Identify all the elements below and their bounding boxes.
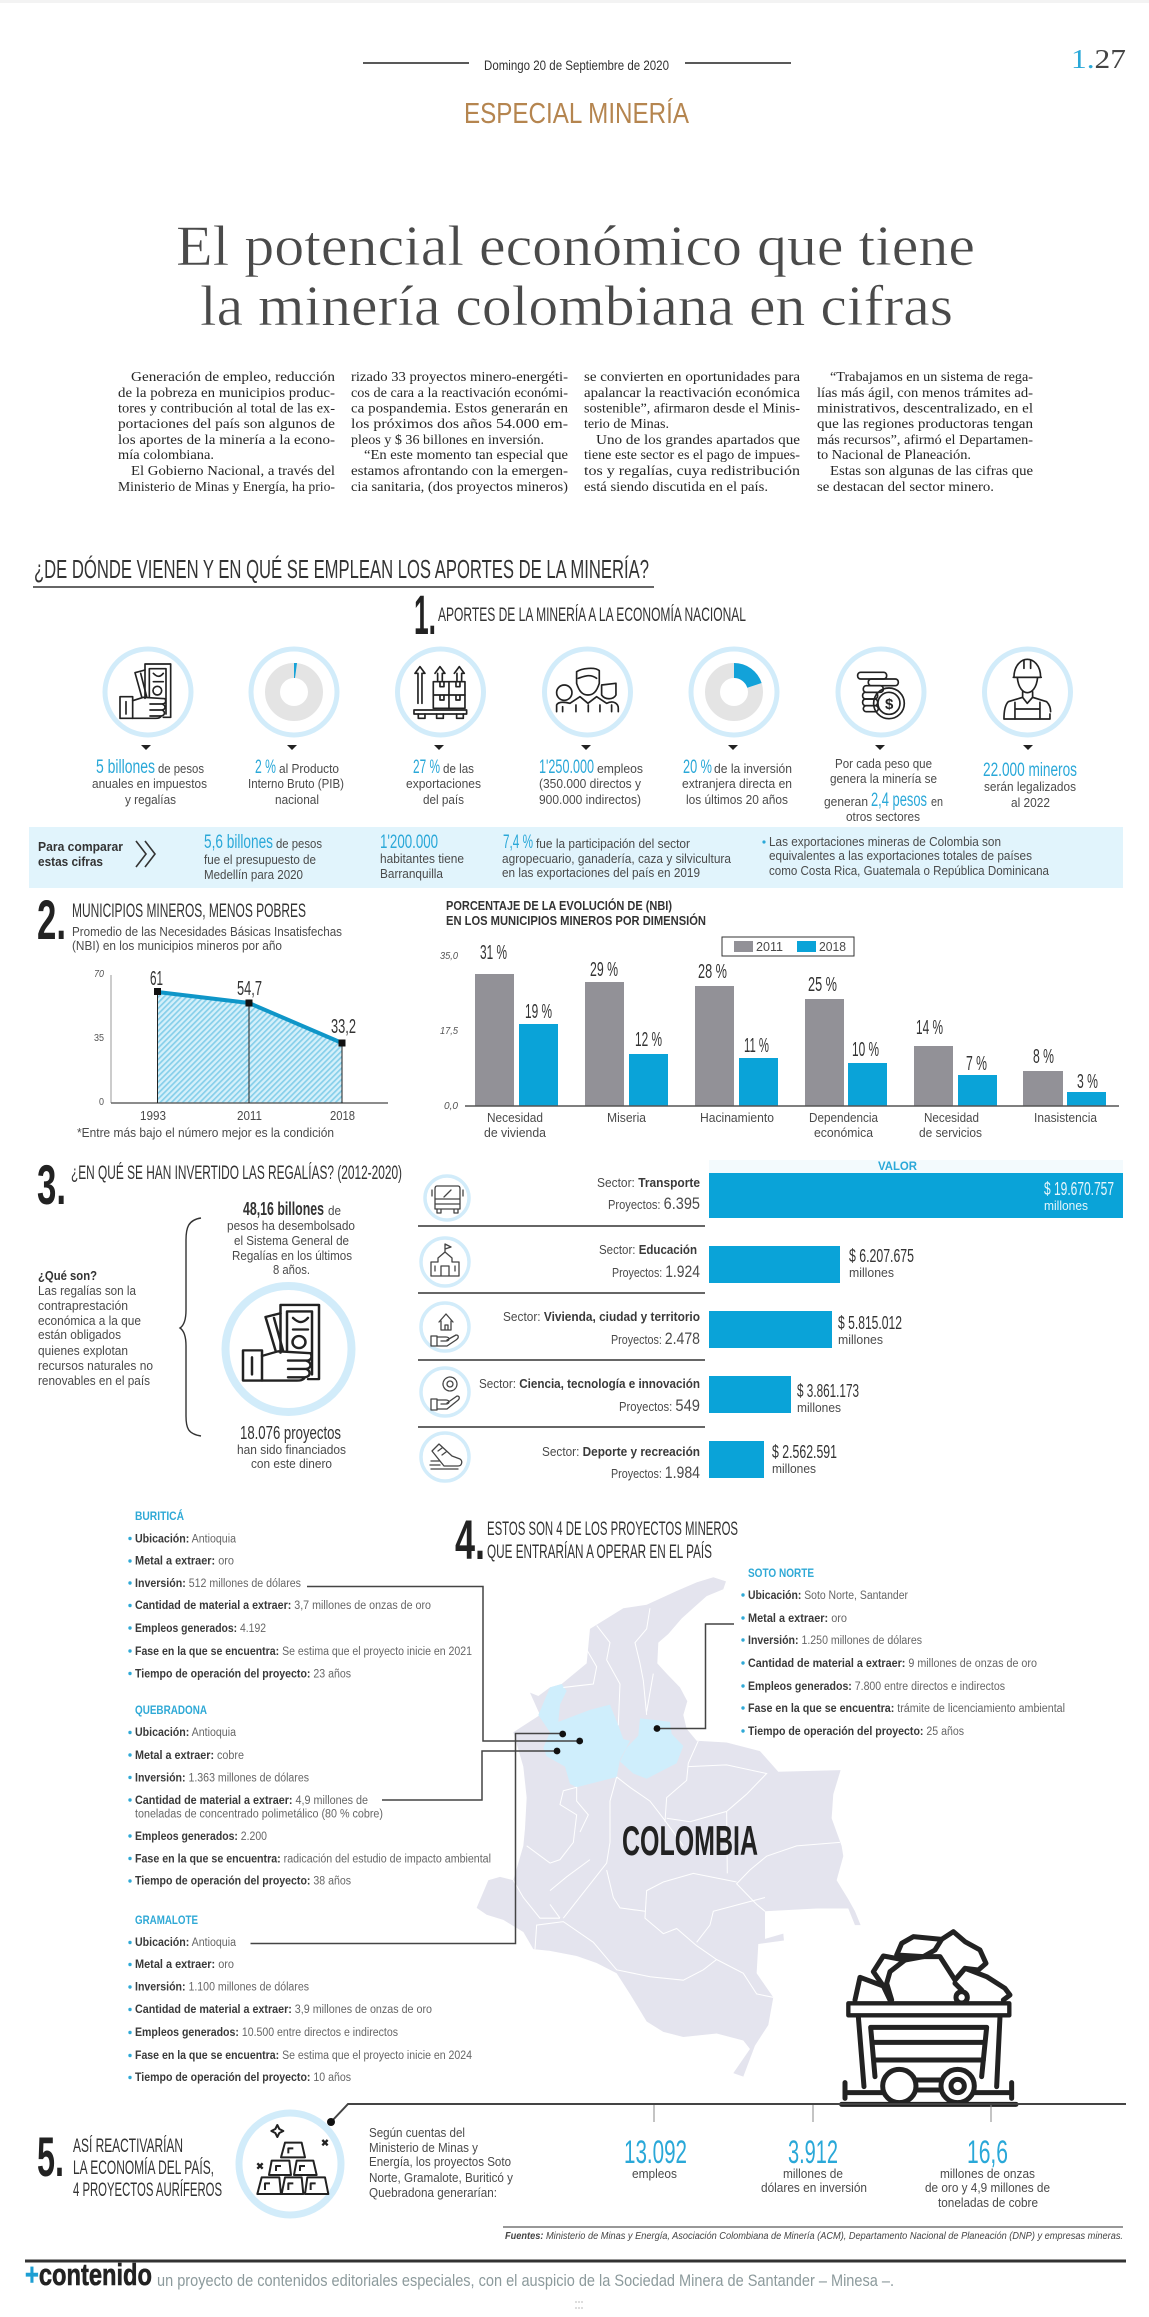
print registration marks xyxy=(576,2301,582,2309)
stat 4: empleos xyxy=(539,649,643,807)
intro text: column 4 xyxy=(817,369,1034,494)
sector: transporte: Proyectos: 6.395 xyxy=(608,1194,700,1213)
project: Buriticá: Inversión: 512 millones de dólares xyxy=(135,1578,301,1590)
text: según cuentas xyxy=(369,2125,513,2200)
bar value labels: 31 % xyxy=(480,942,507,964)
icon: bus xyxy=(425,1176,469,1220)
sector: deporte: millones xyxy=(772,1461,816,1476)
category labels xyxy=(484,1110,1098,1140)
stat 7: 22.000 mineros: al 2022 xyxy=(1011,795,1050,810)
section 5 divider line xyxy=(327,2104,1126,2126)
section 2 heading: 2. xyxy=(37,888,66,951)
donut chart: 2 % xyxy=(251,649,337,735)
sector: vivienda: Proyectos: 2.478 xyxy=(611,1329,700,1348)
stat: onzas: de oro y 4,9 millones de xyxy=(925,2180,1050,2195)
intro text: column 2: cia sanitaria, (dos proyectos mineros) xyxy=(351,479,568,494)
comparison: Barranquilla: habitantes tiene xyxy=(380,851,464,866)
sector: ciencia: Sector: Ciencia, tecnología e innovación xyxy=(479,1376,700,1391)
chart: valor por sector xyxy=(418,1159,1123,1482)
stat 1: 5 billones: anuales en impuestos xyxy=(92,776,207,791)
intro text: column 1: Generación de empleo, reducción xyxy=(131,369,335,384)
project: Quebradona xyxy=(128,1705,491,1888)
bar value labels: 28 % xyxy=(698,961,727,983)
intro text: column 4: que las regiones productoras tengan xyxy=(817,416,1033,431)
stat 6: 2,4 pesos xyxy=(824,649,943,824)
project: Quebradona: Empleos generados: 2.200 xyxy=(135,1831,267,1843)
text: qué son las regalías xyxy=(38,1268,153,1388)
comparison: exports: como Costa Rica, Guatemala o República Dominicana xyxy=(769,863,1050,878)
section 5 heading xyxy=(37,2125,222,2201)
intro text: column 3: apalancar la reactivación económica xyxy=(584,385,800,400)
stat 2: 2 % PIB: Interno Bruto (PIB) xyxy=(248,776,344,791)
project: Buriticá: Tiempo de operación del proyecto: 23 años xyxy=(135,1668,351,1680)
sector: ciencia: $ 3.861.173 xyxy=(797,1381,859,1401)
section label: ESPECIAL MINERÍA xyxy=(464,97,690,130)
line chart: NBI promedio: 1993 xyxy=(140,1108,166,1123)
section 3 heading: 3. xyxy=(37,1153,66,1216)
stat 5: 20 % inversión: extranjera directa en xyxy=(682,776,792,791)
category labels: Necesidad xyxy=(487,1110,543,1125)
category labels: Inasistencia xyxy=(1034,1110,1098,1125)
stat 5: 20 % inversión: los últimos 20 años xyxy=(686,792,788,807)
intro text: column 4: ministrativos, descentralizado, en el xyxy=(817,400,1033,416)
sector: deporte: $ 2.562.591 xyxy=(772,1442,837,1462)
icon: money in hand xyxy=(105,649,191,735)
intro text: column 1: los aportes de la minería a la econo- xyxy=(118,432,336,447)
chart title xyxy=(446,898,706,928)
sector: deporte xyxy=(421,1433,837,1482)
stat 7: 22.000 mineros xyxy=(983,649,1077,810)
project: Buriticá: BURITICÁ xyxy=(135,1510,184,1523)
category labels: económica xyxy=(814,1125,874,1140)
stat 6: 2,4 pesos: 2,4 pesos xyxy=(871,790,927,811)
stat: empleos: empleos xyxy=(632,2166,677,2181)
project: Quebradona: Tiempo de operación del proyecto: 38 años xyxy=(135,1876,351,1888)
bar value labels: 10 % xyxy=(852,1039,879,1061)
line chart: NBI promedio: 2011 xyxy=(237,1108,262,1123)
section 3 heading xyxy=(37,1153,402,1216)
comparison label: Para comparar xyxy=(38,839,123,854)
icon: coins xyxy=(838,649,924,735)
text: qué son las regalías: recursos naturales no xyxy=(38,1358,153,1373)
comparison: exports: equivalentes a las exportaciones totales de países xyxy=(769,848,1032,863)
text: qué son las regalías: están obligados xyxy=(38,1327,121,1342)
text: según cuentas: Norte, Gramalote, Buriticó y xyxy=(369,2170,513,2185)
comparison: agro: en las exportaciones del país en 2019 xyxy=(502,865,700,880)
line chart: NBI promedio: 2018 xyxy=(330,1108,355,1123)
project: Quebradona: Cantidad de material a extraer: 4,9 millones de xyxy=(135,1795,368,1807)
text: 48,16 billones: de xyxy=(328,1203,341,1218)
sector: transporte: $ 19.670.757 xyxy=(1044,1179,1114,1199)
icon: coins: $ xyxy=(885,696,894,713)
text: 48,16 billones: 8 años. xyxy=(273,1262,310,1277)
sector: transporte xyxy=(425,1173,1123,1220)
intro text: column 4: to Nacional de Planeación. xyxy=(817,447,971,462)
title: la minería colombiana en cifras xyxy=(200,275,953,338)
bar value labels xyxy=(480,942,1098,1093)
text: según cuentas: Ministerio de Minas y xyxy=(369,2140,478,2155)
stat 6: 2,4 pesos: Por cada peso que xyxy=(835,756,932,771)
text: 18.076 proyectos xyxy=(237,1423,346,1471)
stat 1: 5 billones xyxy=(92,649,207,807)
stat 2: 2 % PIB: 2 % xyxy=(255,757,276,778)
comparison label: estas cifras xyxy=(38,854,103,869)
text: qué son las regalías: renovables en el país xyxy=(38,1373,150,1388)
stat 6: 2,4 pesos: genera la minería se xyxy=(830,771,937,786)
project: Gramalote: Ubicación: Antioquia xyxy=(135,1937,237,1949)
bar value labels: 11 % xyxy=(744,1035,769,1057)
line chart: NBI promedio: 33,2 xyxy=(331,1016,356,1038)
project: Quebradona: Metal a extraer: cobre xyxy=(135,1750,244,1762)
sector: educación: Proyectos: 1.924 xyxy=(612,1262,700,1281)
stat: onzas: 16,6 xyxy=(967,2134,1008,2170)
chart title: PORCENTAJE DE LA EVOLUCIÓN DE (NBI) xyxy=(446,898,672,913)
intro text: column 1: de la pobreza en municipios produc- xyxy=(118,385,336,400)
category labels: Dependencia xyxy=(809,1110,879,1125)
intro text: column 1: mía colombiana. xyxy=(118,447,214,462)
text: según cuentas: Según cuentas del xyxy=(369,2125,465,2140)
footer xyxy=(25,2257,894,2292)
footer rule xyxy=(25,2260,1126,2262)
intro text: column 3: tos y regalías, cuya redistribución xyxy=(584,463,800,478)
sector: deporte: Sector: Deporte y recreación xyxy=(542,1444,700,1459)
line chart: NBI promedio: 61 xyxy=(150,968,163,990)
stat: onzas: toneladas de cobre xyxy=(938,2195,1038,2210)
footer: un proyecto de contenidos editoriales especiales, con el auspicio de la Sociedad Minera de Santander – Minesa –. xyxy=(157,2271,894,2290)
project: Soto Norte: Cantidad de material a extraer: 9 millones de onzas de oro xyxy=(748,1658,1037,1670)
sector: transporte: millones xyxy=(1044,1198,1088,1213)
stat 4: empleos: (350.000 directos y xyxy=(539,776,641,791)
project: Quebradona: Inversión: 1.363 millones de dólares xyxy=(135,1773,309,1785)
project: Buriticá: Empleos generados: 4.192 xyxy=(135,1623,266,1635)
project: Quebradona: Ubicación: Antioquia xyxy=(135,1727,237,1739)
sector: vivienda: Sector: Vivienda, ciudad y territorio xyxy=(503,1309,700,1324)
project: Soto Norte: Ubicación: Soto Norte, Santander xyxy=(748,1590,908,1602)
comparison: agro: fue la participación del sector xyxy=(536,836,691,851)
bar value labels: 8 % xyxy=(1033,1046,1054,1068)
stat: inversión: dólares en inversión xyxy=(761,2180,867,2195)
stat 2: 2 % PIB xyxy=(248,649,344,807)
stat 2: 2 % PIB: nacional xyxy=(275,792,319,807)
panel: para comparar estas cifras xyxy=(29,827,1123,888)
stat 2: 2 % PIB: al Producto xyxy=(279,761,339,776)
icon: group of people xyxy=(544,649,630,735)
sector: transporte: Sector: Transporte xyxy=(597,1175,700,1190)
title xyxy=(176,215,975,338)
stat: inversión: 3.912 xyxy=(788,2134,838,2170)
icon: gear in hand xyxy=(421,1368,469,1416)
intro text: column 3: Uno de los grandes apartados que xyxy=(596,432,800,447)
text: 18.076 proyectos: han sido financiados xyxy=(237,1442,346,1457)
comparison: Barranquilla: 1'200.000 xyxy=(380,832,438,853)
section 1 heading: APORTES DE LA MINERÍA A LA ECONOMÍA NACIONAL xyxy=(438,603,746,626)
project: Soto Norte: Fase en la que se encuentra: trámite de licenciamiento ambiental xyxy=(748,1703,1065,1715)
intro text: column 1 xyxy=(118,369,336,494)
donut chart: 20 % xyxy=(691,649,777,735)
text: qué son las regalías: ¿Qué son? xyxy=(38,1268,97,1283)
stat: onzas: millones de onzas xyxy=(940,2166,1035,2181)
project: Quebradona: Fase en la que se encuentra: radicación del estudio de impacto ambiental xyxy=(135,1853,491,1865)
stat 6: 2,4 pesos: generan xyxy=(824,794,868,809)
text: 48,16 billones: 48,16 billones xyxy=(243,1199,324,1219)
project: Gramalote xyxy=(128,1915,473,2084)
comparison label xyxy=(38,839,123,869)
icon: school xyxy=(421,1238,469,1286)
section 2 heading: MUNICIPIOS MINEROS, MENOS POBRES xyxy=(72,900,306,922)
sector: vivienda: $ 5.815.012 xyxy=(838,1313,902,1333)
icon: pallet with arrows xyxy=(398,649,484,735)
intro text: column 4: se destacan del sector minero. xyxy=(817,479,994,494)
project: Gramalote: Tiempo de operación del proyecto: 10 años xyxy=(135,2072,351,2084)
section 5 heading: 4 PROYECTOS AURÍFEROS xyxy=(73,2178,222,2201)
text: 48,16 billones xyxy=(227,1199,355,1277)
legend xyxy=(722,937,854,956)
line chart: NBI promedio: 54,7 xyxy=(237,978,262,1000)
section 4 heading: QUE ENTRARÍAN A OPERAR EN EL PAÍS xyxy=(487,1540,712,1563)
icon: mine cart xyxy=(842,1932,1016,2104)
stat 7: 22.000 mineros: serán legalizados xyxy=(984,779,1076,794)
bar chart: evolución NBI por dimensión: 17,5 xyxy=(440,1026,458,1037)
line chart: NBI promedio: 0 xyxy=(99,1097,104,1108)
intro text: column 3: está siendo discutida en el país. xyxy=(584,479,768,494)
text: según cuentas: Quebradona generarían: xyxy=(369,2185,497,2200)
stat 1: 5 billones: 5 billones xyxy=(96,757,155,778)
stat: inversión: millones de xyxy=(783,2166,843,2181)
bar value labels: 14 % xyxy=(916,1017,943,1039)
section 4 heading: 4. xyxy=(455,1508,485,1571)
line chart: NBI promedio: 70 xyxy=(94,969,104,980)
comparison: Medellín: de pesos xyxy=(276,836,322,851)
icon: miner xyxy=(984,649,1070,735)
project: Buriticá xyxy=(128,1510,472,1680)
project: Gramalote: Cantidad de material a extraer: 3,9 millones de onzas de oro xyxy=(135,2004,432,2016)
intro text: column 2: estamos afrontando con la emergen- xyxy=(351,463,569,478)
stat 6: 2,4 pesos: otros sectores xyxy=(846,809,920,824)
stat: empleos xyxy=(624,2134,687,2181)
bar value labels: 3 % xyxy=(1077,1071,1098,1093)
intro text: column 4: más recursos”, afirmó el Departamen- xyxy=(817,432,1034,447)
bar chart: evolución NBI por dimensión: 35,0 xyxy=(440,951,458,962)
section 3 heading: ¿EN QUÉ SE HAN INVERTIDO LAS REGALÍAS? (2012-2020) xyxy=(71,1161,402,1184)
icon: double chevron xyxy=(136,841,155,867)
icon: sneaker xyxy=(421,1433,469,1481)
section 4 heading xyxy=(455,1508,738,1571)
footer: +contenido xyxy=(25,2257,152,2292)
bar value labels: 19 % xyxy=(525,1001,552,1023)
intro text: column 2 xyxy=(351,369,569,494)
text: qué son las regalías: económica a la que xyxy=(38,1313,141,1328)
text: según cuentas: Energía, los proyectos Soto xyxy=(369,2154,511,2169)
sector: ciencia: Proyectos: 549 xyxy=(619,1396,700,1415)
category labels: Necesidad xyxy=(924,1110,979,1125)
project: Gramalote: Empleos generados: 10.500 entre directos e indirectos xyxy=(135,2027,398,2039)
header: date line: Domingo 20 de Septiembre de 2020 xyxy=(484,57,669,73)
bar value labels: 25 % xyxy=(808,974,837,996)
legend: 2018 xyxy=(819,939,846,954)
intro text: column 1: portaciones del país son algunos de xyxy=(118,416,335,431)
intro text: column 2: rizado 33 proyectos minero-energéti- xyxy=(351,369,569,384)
comparison: Medellín: Medellín para 2020 xyxy=(204,867,303,882)
comparison: agro: 7,4 % xyxy=(503,832,533,853)
intro text: column 1: tores y contribución al total de las ex- xyxy=(118,400,336,416)
comparison: Medellín: 5,6 billones xyxy=(204,832,273,853)
intro text: column 2: cos de cara a la reactivación económi- xyxy=(351,385,569,400)
section 2 heading xyxy=(37,888,342,953)
comparison: Barranquilla xyxy=(380,832,464,881)
project: Buriticá: Cantidad de material a extraer: 3,7 millones de onzas de oro xyxy=(135,1600,431,1612)
project: Gramalote: GRAMALOTE xyxy=(135,1915,198,1927)
legend: 2011 xyxy=(756,939,783,954)
icon: gold bars xyxy=(239,2113,341,2215)
sector: vivienda: millones xyxy=(838,1332,883,1347)
main section heading: ¿DE DÓNDE VIENEN Y EN QUÉ SE EMPLEAN LOS APORTES DE LA MINERÍA? xyxy=(34,554,649,584)
text: qué son las regalías: contraprestación xyxy=(38,1298,128,1313)
map label: COLOMBIA xyxy=(622,1817,758,1864)
text: 48,16 billones: pesos ha desembolsado xyxy=(227,1218,355,1233)
stat 1: 5 billones: y regalías xyxy=(125,792,176,807)
intro text: column 2: “En este momento tan especial que xyxy=(364,447,568,462)
icon: house in hand xyxy=(421,1303,469,1351)
comparison: exports: Las exportaciones mineras de Colombia son xyxy=(769,834,1001,849)
brace xyxy=(180,1218,201,1436)
sector: ciencia: millones xyxy=(797,1400,841,1415)
section 1 heading xyxy=(414,583,746,646)
sector: educación: Sector: Educación xyxy=(599,1242,697,1257)
project: Quebradona: QUEBRADONA xyxy=(135,1705,207,1717)
stat 3: 27 % exportaciones: 27 % xyxy=(413,757,440,778)
intro text: column 2: los próximos dos años 54.000 em- xyxy=(351,416,569,431)
intro text: column 3: tiene este sector es el pago de impues- xyxy=(584,447,801,462)
project: Soto Norte: Inversión: 1.250 millones de dólares xyxy=(748,1635,922,1647)
project: Gramalote: Fase en la que se encuentra: Se estima que el proyecto inicie en 2024 xyxy=(135,2050,473,2062)
project: Soto Norte: Empleos generados: 7.800 entre directos e indirectos xyxy=(748,1681,1005,1693)
project: Buriticá: Metal a extraer: oro xyxy=(135,1556,234,1568)
chart note: *Entre más bajo el número mejor es la condición xyxy=(77,1125,334,1140)
text: qué son las regalías: Las regalías son la xyxy=(38,1283,137,1298)
sector: educación: $ 6.207.675 xyxy=(849,1246,914,1266)
stat 7: 22.000 mineros: 22.000 mineros xyxy=(983,760,1077,781)
comparison: agro: agropecuario, ganadería, caza y silvicultura xyxy=(502,851,732,866)
sector: vivienda xyxy=(421,1303,902,1351)
comparison: exports xyxy=(762,834,1050,878)
intro text: column 1: El Gobierno Nacional, a través del xyxy=(131,463,335,478)
stat 6: 2,4 pesos: en xyxy=(931,794,943,809)
project: Gramalote: Metal a extraer: oro xyxy=(135,1959,234,1971)
stat 4: empleos: 1'250.000 xyxy=(539,757,594,778)
section 5 heading: 5. xyxy=(37,2125,64,2188)
project: Quebradona: toneladas de concentrado polimetálico (80 % cobre) xyxy=(135,1809,383,1821)
sector: deporte: Proyectos: 1.984 xyxy=(611,1463,700,1482)
bars xyxy=(475,974,1106,1106)
stat 3: 27 % exportaciones xyxy=(398,649,484,807)
intro text: column 3 xyxy=(584,369,801,494)
intro text: column 3: se convierten en oportunidades para xyxy=(584,369,800,384)
text: qué son las regalías: quienes explotan xyxy=(38,1343,128,1358)
icon: money in hand, large xyxy=(226,1286,352,1412)
stat 4: empleos: empleos xyxy=(597,761,643,776)
project: Soto Norte: Metal a extraer: oro xyxy=(748,1613,847,1625)
sector: educación xyxy=(421,1238,914,1286)
text: 18.076 proyectos: con este dinero xyxy=(251,1456,332,1471)
stat 1: 5 billones: de pesos xyxy=(158,761,204,776)
category labels: Hacinamiento xyxy=(700,1110,774,1125)
project: Soto Norte: Tiempo de operación del proyecto: 25 años xyxy=(748,1726,964,1738)
section 1 heading: 1. xyxy=(414,583,436,646)
chart: valor por sector: VALOR xyxy=(878,1159,917,1173)
comparison: agro xyxy=(502,832,732,880)
bar value labels: 29 % xyxy=(590,959,618,981)
bar chart: evolución NBI por dimensión xyxy=(440,898,1119,1140)
stat 5: 20 % inversión: 20 % xyxy=(683,757,712,778)
text: 48,16 billones: Regalías en los últimos xyxy=(232,1248,352,1263)
sector: educación: millones xyxy=(849,1265,894,1280)
section 4 heading: ESTOS SON 4 DE LOS PROYECTOS MINEROS xyxy=(487,1518,738,1540)
leader lines and project markers xyxy=(250,1586,734,1944)
intro text: column 1: Ministerio de Minas y Energía, ha prio- xyxy=(118,479,335,494)
intro text: column 2: pleos y $ 36 billones en inversión. xyxy=(351,432,544,447)
intro text: column 3: terio de Minas. xyxy=(584,416,669,431)
stat 5: 20 % inversión: de la inversión xyxy=(714,761,792,776)
line chart: NBI promedio: 35 xyxy=(94,1033,104,1044)
bar value labels: 7 % xyxy=(966,1053,987,1075)
text: 18.076 proyectos: 18.076 proyectos xyxy=(240,1423,341,1443)
stat 5: 20 % inversión xyxy=(682,649,792,807)
line chart: NBI promedio xyxy=(94,968,388,1123)
stat 3: 27 % exportaciones: de las xyxy=(443,761,474,776)
stat 4: empleos: 900.000 indirectos) xyxy=(539,792,641,807)
comparison: Medellín xyxy=(204,832,322,882)
category labels: Miseria xyxy=(607,1110,647,1125)
project: Soto Norte xyxy=(741,1568,1065,1738)
section 2 heading: (NBI) en los municipios mineros por año xyxy=(72,938,282,953)
project: Gramalote: Inversión: 1.100 millones de dólares xyxy=(135,1982,309,1994)
stat 3: 27 % exportaciones: del país xyxy=(423,792,464,807)
section 5 heading: ASÍ REACTIVARÍAN xyxy=(73,2134,183,2157)
map of Colombia xyxy=(477,1577,861,2077)
intro text: column 2: ca pospandemia. Estos generarán en xyxy=(351,400,568,416)
category labels: de servicios xyxy=(919,1125,982,1140)
intro text: column 4: “Trabajamos en un sistema de rega- xyxy=(830,369,1034,384)
sector: ciencia xyxy=(421,1368,859,1416)
title: El potencial económico que tiene xyxy=(176,215,975,278)
stat: empleos: 13.092 xyxy=(624,2134,687,2170)
project: Buriticá: Ubicación: Antioquia xyxy=(135,1533,237,1545)
bar chart: evolución NBI por dimensión: 0,0 xyxy=(444,1101,458,1112)
section 2 heading: Promedio de las Necesidades Básicas Insatisfechas xyxy=(72,924,342,939)
section 5 heading: LA ECONOMÍA DEL PAÍS, xyxy=(73,2156,214,2179)
stat: inversión xyxy=(761,2134,867,2195)
project: Buriticá: Fase en la que se encuentra: Se estima que el proyecto inicie en 2021 xyxy=(135,1646,472,1658)
page number: 1.27 xyxy=(1071,44,1126,74)
comparison: Medellín: fue el presupuesto de xyxy=(204,852,316,867)
category labels: de vivienda xyxy=(484,1125,547,1140)
intro text: column 4: Estas son algunas de las cifras que xyxy=(830,463,1033,478)
text: 48,16 billones: el Sistema General de xyxy=(234,1233,349,1248)
bar value labels: 12 % xyxy=(635,1029,662,1051)
stat: onzas xyxy=(925,2134,1050,2210)
project: Soto Norte: SOTO NORTE xyxy=(748,1568,814,1580)
comparison: Barranquilla: Barranquilla xyxy=(380,866,444,881)
intro text: column 3: sostenible”, afirmaron desde el Minis- xyxy=(584,400,801,416)
intro text: column 4: lías más ágil, con menos trámites ad- xyxy=(817,385,1034,400)
stat 3: 27 % exportaciones: exportaciones xyxy=(406,776,481,791)
chart title: EN LOS MUNICIPIOS MINEROS POR DIMENSIÓN xyxy=(446,913,706,928)
